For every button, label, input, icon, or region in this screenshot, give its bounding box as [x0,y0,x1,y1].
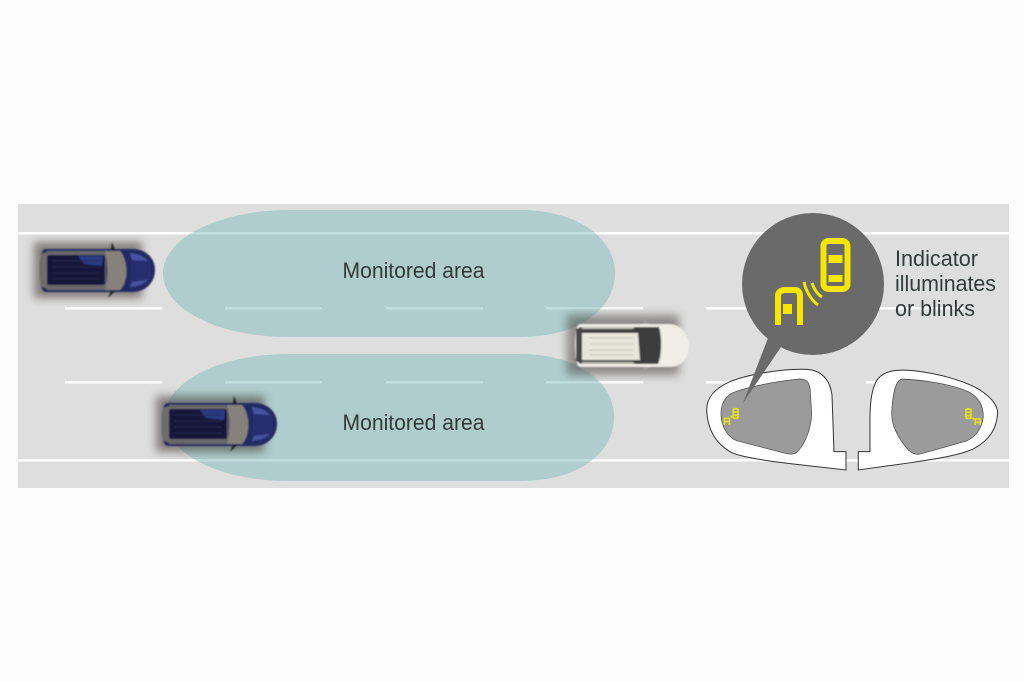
mirror glass: right [892,379,983,454]
icon: adjacent car with radar waves [778,282,822,325]
indicator caption [895,246,996,321]
car: white, alongside [567,315,689,375]
left door mirror [707,369,846,470]
icon: vehicle indicator [824,241,848,289]
right door mirror [858,370,998,470]
road [18,204,1009,488]
small indicator: right mirror [966,409,980,425]
monitored area: lower lane [165,354,614,481]
indicator caption: or blinks [895,296,975,321]
mirror housing: left [707,369,846,470]
indicator caption: illuminates [895,271,996,296]
label: upper monitored area: Monitored area [342,258,485,283]
mirror housing: right [858,370,998,470]
label: lower monitored area: Monitored area [342,410,485,435]
car: blue, rear right [156,396,277,452]
indicator caption: Indicator [895,246,978,271]
car: blue, rear left [34,242,155,298]
callout bubble [742,213,884,403]
mirror glass: left [721,379,812,454]
monitored area: upper lane [163,210,615,337]
small indicator: left mirror [724,409,738,425]
